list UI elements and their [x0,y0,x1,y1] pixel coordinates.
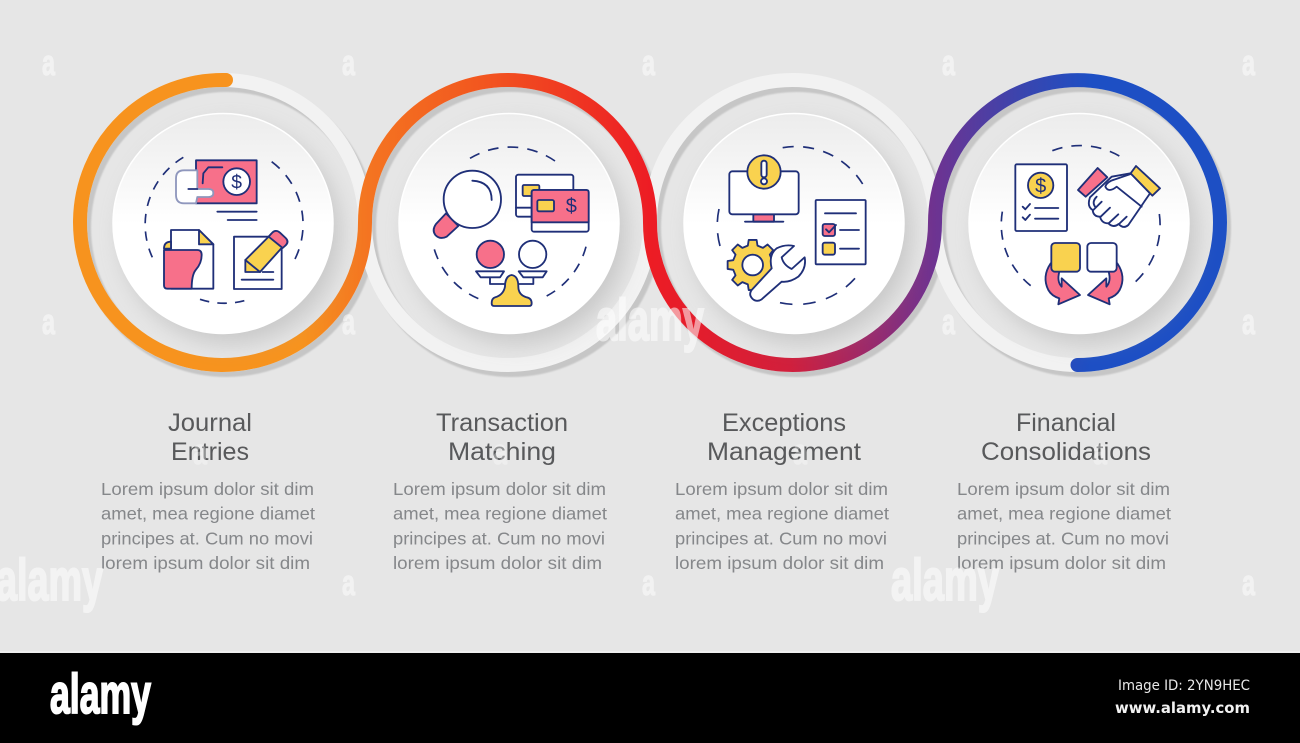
step 2 description: principes at. Cum no movi [393,528,605,548]
step 2 description: amet, mea regione diamet [393,504,607,524]
icon group: financial consolidations: $ [1035,175,1046,197]
white disc 4 [969,114,1197,344]
watermarks: a [493,431,508,472]
footer bar [0,651,1300,743]
step 3 heading: Management [707,438,861,466]
icon: checklist [816,200,866,264]
step 2 heading: Transaction [436,409,568,437]
step 1 description: principes at. Cum no movi [101,528,313,548]
icon: monitor with alert [729,155,799,222]
watermarks: a [42,42,56,83]
step 4 description: lorem ipsum dolor sit dim [957,553,1166,573]
icon: balance scale [476,241,547,306]
white disc 1 [113,114,341,344]
icon: note with pencil [234,231,287,289]
icon: bank cards [516,175,589,232]
step 1 heading: Entries [171,438,249,466]
step 2 description: Lorem ipsum dolor sit dim [393,479,606,499]
watermarks: a [42,301,56,342]
step 3 description: Lorem ipsum dolor sit dim [675,479,888,499]
step 3 description: amet, mea regione diamet [675,504,889,524]
icon: banknote and hand [176,160,257,220]
icon group: exceptions management [717,147,866,304]
step 2 description: lorem ipsum dolor sit dim [393,553,602,573]
watermarks: a [793,431,808,472]
pale ghost rings [80,80,1220,365]
watermarks: a [1242,301,1256,342]
watermarks: a [342,301,356,342]
watermarks: a [342,562,356,603]
footer logo: alamy [50,662,151,725]
watermarks: a [193,431,208,472]
icon group: transaction matching [434,147,589,306]
ring shadows [84,85,1224,370]
watermarks: a [942,42,956,83]
white disc 3 [684,114,912,344]
icon group: journal entries: $ [231,173,242,194]
white disc 2 [399,114,627,344]
watermarks: a [642,562,656,603]
step 1 description: Lorem ipsum dolor sit dim [101,479,314,499]
step 4 heading: Financial [1016,409,1116,437]
watermarks: alamy [596,288,704,353]
watermarks: a [942,301,956,342]
icon: financial document [1015,164,1067,231]
step 1 description: lorem ipsum dolor sit dim [101,553,310,573]
watermarks: a [342,42,356,83]
icon: gear and wrench [728,240,805,301]
watermarks: a [1242,562,1256,603]
watermarks: alamy [891,548,999,613]
image id: Image ID: 2YN9HEC [1118,678,1250,694]
step 2 heading: Matching [448,438,556,466]
watermarks: a [642,42,656,83]
step 4 description: Lorem ipsum dolor sit dim [957,479,1170,499]
step 3 heading: Exceptions [722,409,846,437]
step 4 description: amet, mea regione diamet [957,504,1171,524]
icon: magnifier [434,171,501,238]
step 4 heading: Consolidations [981,438,1151,466]
watermarks [0,42,1256,613]
step 1 heading: Journal [168,409,252,437]
step 3 description: principes at. Cum no movi [675,528,887,548]
watermarks: a [1242,42,1256,83]
icon group: journal entries [145,157,303,303]
icon: handshake [1078,166,1160,227]
icon group: financial consolidations [1001,146,1160,304]
step 1 description: amet, mea regione diamet [101,504,315,524]
step 4 description: principes at. Cum no movi [957,528,1169,548]
watermarks: a [1093,431,1108,472]
icon group: transaction matching: $ [566,196,577,218]
gradient ribbon connecting the four steps [80,80,1220,365]
website: www.alamy.com [1115,699,1250,717]
icon: folder with document [164,230,213,289]
step 3 description: lorem ipsum dolor sit dim [675,553,884,573]
watermarks: alamy [0,548,103,613]
icon: exchange squares with arrows [1045,243,1123,304]
